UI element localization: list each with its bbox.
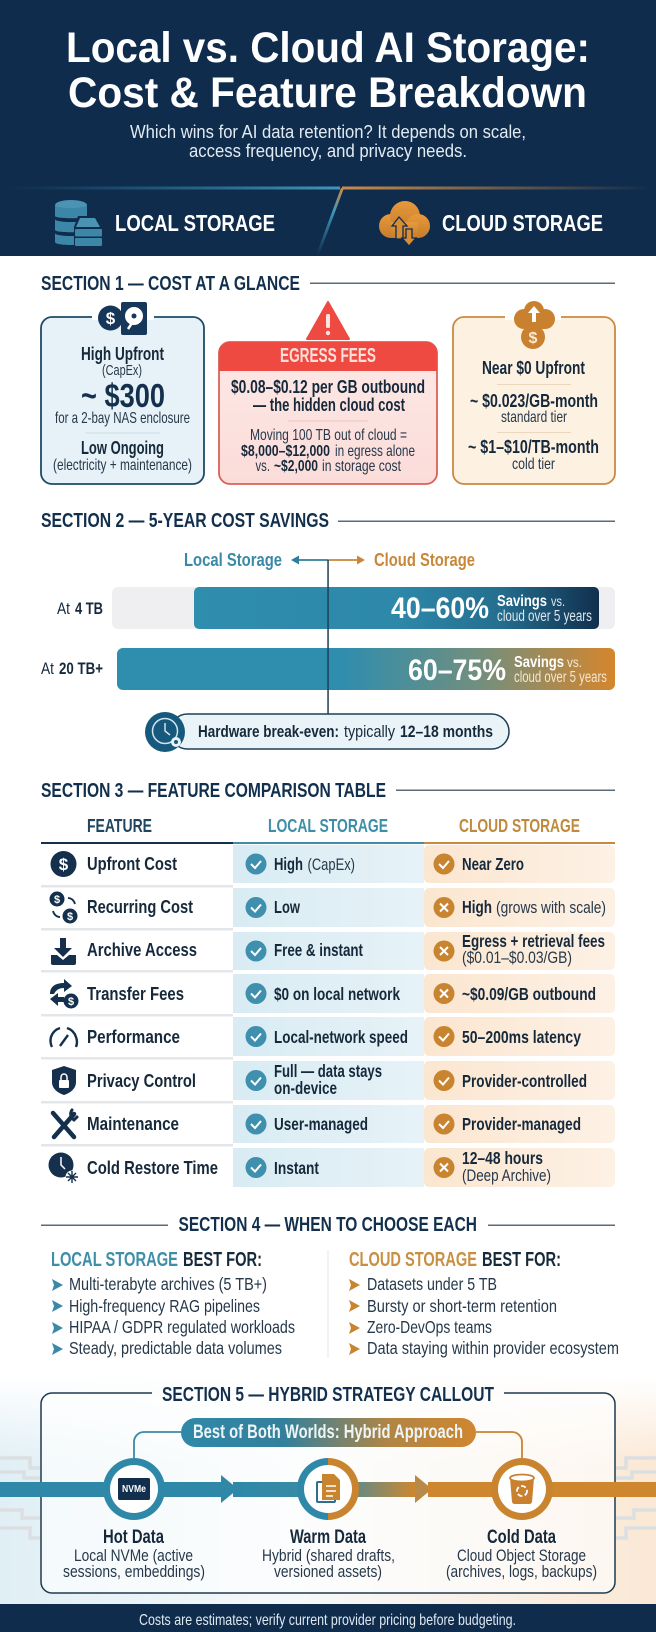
row: upfront cost: Near Zero [462,854,524,874]
row: performance: 50–200ms latency [462,1027,581,1047]
row: performance [51,1017,615,1056]
panel: egress fees: ~$2,000 [274,458,318,475]
chart: savings at 20 TB: Savings [514,654,564,671]
connector lines [134,1432,522,1458]
section 5: hybrid strategy callout [0,1375,656,1604]
list: cloud storage best for [349,1249,619,1358]
node: hot data [63,1458,205,1581]
section 3 heading: SECTION 3 — FEATURE COMPARISON TABLE [41,779,386,802]
icon: transfer arrows with dollar [50,979,78,1008]
subtitle: access frequency, and privacy needs. [189,141,467,161]
node: warm data: Warm Data [290,1527,366,1548]
savings direction legend [184,550,475,570]
icon: cloud with transfer arrows [379,201,430,246]
chart: savings at 20 TB: 20 TB+ [59,659,103,678]
panel: egress fees: in storage cost [322,458,401,475]
icon: warning triangle [307,302,349,339]
section 3: feature comparison table [41,779,615,1187]
panel: local cost: (CapEx) [102,362,142,379]
chart: savings at 4 TB: At [57,599,70,618]
row: recurring cost: Low [274,897,300,917]
icon: dollar and hard drive [98,302,147,335]
row: transfer fees: ~$0.09/GB outbound [462,984,596,1004]
panel: cloud cost: Near $0 Upfront [482,358,585,378]
icon: local database and server [55,200,102,246]
section 5 tinted background [0,1375,656,1604]
icon: crossed tools [53,1110,77,1137]
node: hot data: Hot Data [103,1527,164,1548]
icon: recurring dollars [50,892,78,924]
row: transfer fees: Transfer Fees [87,984,184,1004]
panel: local cost: for a 2-bay NAS enclosure [55,410,190,427]
section 4: when to choose each [41,1213,619,1358]
row: archive access: Free & instant [274,940,363,960]
row: privacy control: Full — data stays [274,1061,382,1081]
icon: NVMe chip [118,1478,150,1500]
icon: recurring dollars: $ [67,911,73,923]
table header: LOCAL STORAGE [268,816,388,836]
row: archive access: Archive Access [87,940,197,960]
callout panel [41,1390,615,1593]
icon: cloud upload with dollar: $ [529,330,538,347]
node: cold data: Cloud Object Storage [457,1546,586,1565]
icon: dollar and hard drive: $ [106,309,116,328]
node: warm data: versioned assets) [274,1562,382,1581]
row: cold restore time: Cold Restore Time [87,1158,218,1178]
chart: savings at 20 TB: vs. [567,654,582,670]
panel: local cost: High Upfront [81,344,164,364]
row: maintenance [53,1105,615,1143]
row: archive access: ($0.01–$0.03/GB) [462,949,572,967]
callout: hardware break-even: Hardware break-even: [198,722,339,741]
row: cold restore time: 12–48 hours [462,1148,543,1168]
panel: egress fees: EGRESS FEES [280,345,376,367]
panel: egress fees: $0.08–$0.12 per GB outbound [231,377,425,397]
list: local storage best for: Multi-terabyte archives (5 TB+) [69,1274,267,1294]
chart: savings at 4 TB: 40–60% [391,592,489,625]
panel: cloud cost [453,301,615,484]
chart: savings at 4 TB: vs. [551,593,565,609]
list: local storage best for: Steady, predictable data volumes [69,1338,282,1358]
chart: savings at 20 TB: cloud over 5 years [514,669,607,686]
row: performance: Performance [87,1027,180,1047]
footer: Costs are estimates; verify current provider pricing before budgeting. [139,1612,516,1629]
list: cloud storage best for: Zero-DevOps teams [367,1317,492,1337]
row: recurring cost: High [462,897,492,917]
row: maintenance: Maintenance [87,1114,179,1134]
icon: shield with lock [52,1066,76,1095]
icon: transfer arrows with dollar: $ [68,996,74,1008]
node: cold data: (archives, logs, backups) [446,1562,597,1581]
icon: clock with gear [145,712,185,752]
row: privacy control: on-device [274,1078,337,1098]
row: upfront cost: High [274,854,303,874]
chart: savings at 4 TB: 4 TB [75,599,103,618]
row: recurring cost: Recurring Cost [87,897,193,917]
list: local storage best for: High-frequency RAG pipelines [69,1296,260,1316]
chart: savings at 20 TB [41,648,615,690]
row: cold restore time: (Deep Archive) [462,1167,551,1185]
row: cold restore time [48,1148,615,1187]
panel: egress fees: — the hidden cloud cost [253,395,405,415]
panel: egress fees: $8,000–$12,000 [241,443,330,460]
section 2 heading: SECTION 2 — 5-YEAR COST SAVINGS [41,509,329,532]
list: local storage best for: LOCAL STORAGE [51,1249,178,1271]
icon: recurring dollars: $ [54,894,60,906]
icon: clock with snowflake [48,1152,78,1184]
icon: download tray [51,938,76,965]
header divider [5,186,652,255]
list: cloud storage best for: CLOUD STORAGE [349,1249,477,1271]
node: warm data [262,1458,395,1581]
list: local storage best for: BEST FOR: [183,1249,262,1271]
row: privacy control: Privacy Control [87,1071,196,1091]
row: privacy control: Provider-controlled [462,1071,587,1091]
section 5 heading: SECTION 5 — HYBRID STRATEGY CALLOUT [162,1383,494,1406]
row: maintenance: Provider-managed [462,1114,581,1134]
section 1: cost at a glance [41,272,615,484]
savings direction legend: Local Storage [184,550,282,570]
row: transfer fees: $0 on local network [274,984,400,1004]
chart: savings at 4 TB: cloud over 5 years [497,608,592,625]
hybrid approach pill [181,1418,476,1447]
arrow: data flow band [0,1475,656,1503]
local storage label: LOCAL STORAGE [115,210,275,236]
row: recurring cost [50,888,615,927]
row: privacy control [52,1061,615,1100]
footer [0,1604,656,1632]
panel: local cost: ~ $300 [81,377,165,414]
chart: savings at 20 TB: 60–75% [408,654,506,687]
node: cold data [446,1458,597,1581]
callout: hardware break-even: typically [344,722,395,741]
icon: cloud upload with dollar [514,301,555,349]
row: archive access: Egress + retrieval fees [462,931,605,951]
table header: FEATURE [87,816,152,836]
row: performance: Local-network speed [274,1027,408,1047]
icon: NVMe chip: NVMe [122,1484,146,1495]
list: cloud storage best for: BEST FOR: [482,1249,561,1271]
title [66,24,590,117]
row: recurring cost: (grows with scale) [496,899,606,917]
node: hot data: Local NVMe (active [74,1546,193,1565]
icon: speed gauge [51,1028,77,1047]
panel: egress fees: Moving 100 TB out of cloud = [250,427,407,444]
icon: document stack [317,1474,340,1502]
circuit decoration [0,1458,656,1538]
node: cold data: Cold Data [487,1527,556,1548]
row separators [41,885,233,1146]
row: upfront cost: Upfront Cost [87,854,177,874]
node: hot data: sessions, embeddings) [63,1562,205,1581]
break-even marker line [327,560,329,714]
list: cloud storage best for: Datasets under 5 TB [367,1274,497,1294]
panel: cloud cost: cold tier [512,456,556,473]
callout: hardware break-even [145,712,509,752]
title: Cost & Feature Breakdown [68,69,587,117]
panel: cloud cost: ~ $0.023/GB-month [470,391,598,411]
title: Local vs. Cloud AI Storage: [66,24,590,72]
hybrid approach pill: Best of Both Worlds: Hybrid Approach [193,1422,463,1443]
panel: egress fees [219,302,437,484]
row: cold restore time: Instant [274,1158,319,1178]
table header: CLOUD STORAGE [459,816,580,836]
cloud storage label: CLOUD STORAGE [442,210,603,236]
column divider [328,1250,329,1358]
row: archive access [51,931,615,970]
callout: hardware break-even: 12–18 months [400,722,493,741]
node: warm data: Hybrid (shared drafts, [262,1546,395,1565]
chart: savings at 20 TB: At [41,659,54,678]
subtitle [130,122,526,161]
table header [41,816,615,844]
panel: egress fees: vs. [256,458,270,475]
panel: cloud cost: standard tier [501,409,567,426]
section 4 heading: SECTION 4 — WHEN TO CHOOSE EACH [178,1213,477,1236]
list: local storage best for [51,1249,295,1358]
chart: savings at 4 TB: Savings [497,593,547,610]
header banner [0,0,656,256]
panel: cloud cost: ~ $1–$10/TB-month [468,437,599,457]
subtitle: Which wins for AI data retention? It depends on scale, [130,122,526,142]
panel: egress fees: in egress alone [335,443,415,460]
panel: local cost: (electricity + maintenance) [53,457,192,474]
section 2: 5-year cost savings [41,509,615,752]
row: upfront cost: $ [59,855,69,874]
row: transfer fees [50,974,615,1013]
section 1 heading: SECTION 1 — COST AT A GLANCE [41,272,300,295]
savings direction legend: Cloud Storage [374,550,475,570]
row: upfront cost: (CapEx) [308,856,355,874]
chart: savings at 4 TB [57,587,615,629]
panel: local cost: Low Ongoing [81,438,164,458]
row: maintenance: User-managed [274,1114,368,1134]
list: local storage best for: HIPAA / GDPR regulated workloads [69,1317,295,1337]
panel: local cost [41,302,204,484]
icon: storage bucket [510,1474,534,1504]
row: upfront cost [50,845,615,883]
list: cloud storage best for: Bursty or short-term retention [367,1296,557,1316]
